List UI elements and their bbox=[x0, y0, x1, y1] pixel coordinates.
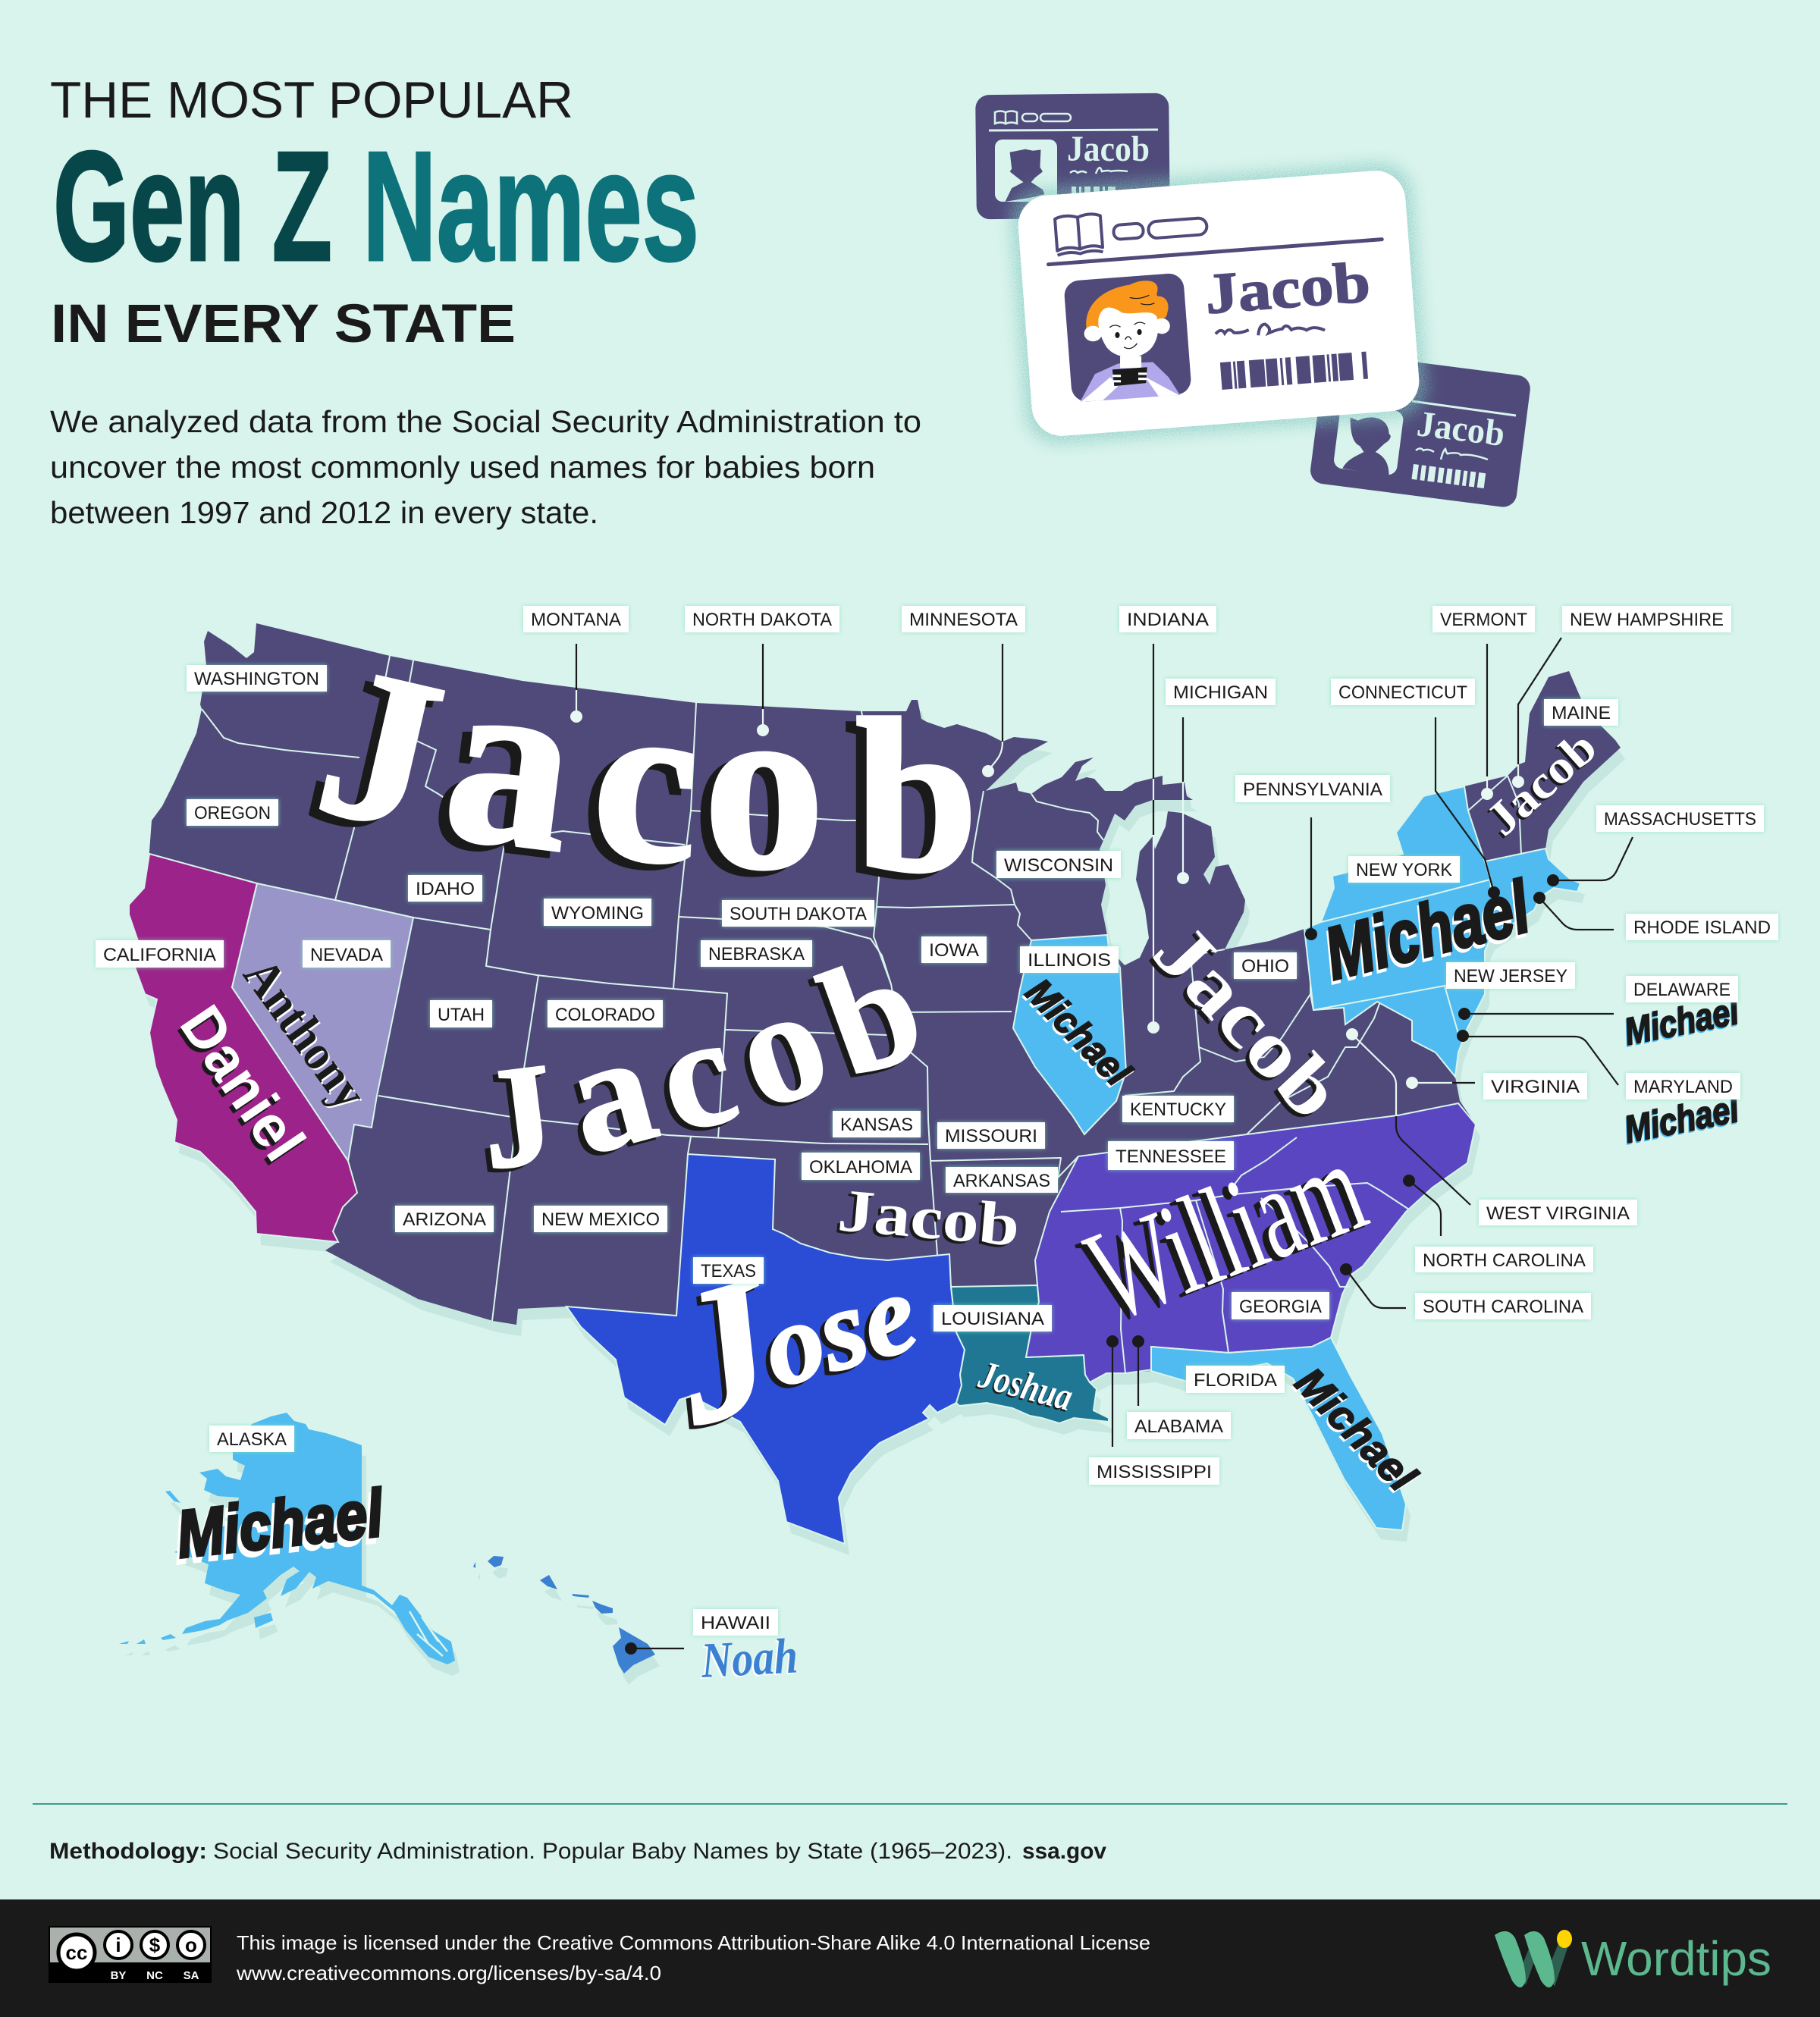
label: Mississippi bbox=[1089, 1457, 1219, 1485]
label: Ohio bbox=[1234, 952, 1297, 979]
label: Missouri: MISSOURI bbox=[945, 1126, 1037, 1147]
label: Maryland bbox=[1626, 1073, 1740, 1099]
state borders bbox=[202, 656, 1380, 1321]
name: Noah: Noah bbox=[699, 1628, 799, 1689]
leader: Alabama bbox=[1132, 1335, 1144, 1406]
label: Louisiana bbox=[934, 1305, 1052, 1332]
methodology: ssa.gov bbox=[1022, 1839, 1106, 1864]
label: Alaska bbox=[209, 1426, 294, 1452]
label: Kansas: KANSAS bbox=[840, 1115, 913, 1135]
leader: Mississippi bbox=[1106, 1335, 1119, 1447]
illustration: ID cards bbox=[975, 93, 1532, 509]
ID card: grainy shadow bbox=[1009, 162, 1429, 445]
label: Indiana bbox=[1119, 606, 1216, 632]
intro text: uncover the most commonly used names for babies born bbox=[50, 450, 875, 485]
name: Jacob (New England): Jacob bbox=[1476, 721, 1607, 845]
name: Jacob (central): J bbox=[472, 1034, 563, 1200]
label: Minnesota: MINNESOTA bbox=[909, 610, 1018, 630]
leader: North Dakota bbox=[757, 644, 769, 736]
name: Jacob (central) bbox=[472, 920, 943, 1200]
ID card: front white bbox=[1016, 168, 1421, 438]
label: Alaska: ALASKA bbox=[217, 1429, 287, 1450]
Alaska panhandle channels bbox=[410, 1611, 447, 1656]
label: Utah bbox=[430, 1000, 492, 1027]
label: Wyoming: WYOMING bbox=[551, 903, 644, 924]
intro text: between 1997 and 2012 in every state. bbox=[50, 495, 598, 530]
label: Minnesota bbox=[902, 606, 1025, 632]
label: Delaware bbox=[1626, 976, 1738, 1002]
name: Jacob (northwest and plains): a bbox=[433, 618, 589, 904]
label: Maryland: MARYLAND bbox=[1633, 1077, 1733, 1097]
label: Florida: FLORIDA bbox=[1194, 1370, 1277, 1391]
label: Illinois: ILLINOIS bbox=[1028, 950, 1111, 971]
leader: Vermont bbox=[1481, 644, 1493, 800]
label: Delaware: DELAWARE bbox=[1633, 980, 1731, 1000]
label: Illinois bbox=[1020, 946, 1119, 973]
label: Vermont: VERMONT bbox=[1440, 610, 1527, 630]
label: Pennsylvania bbox=[1235, 775, 1390, 802]
name: William: William bbox=[1069, 1112, 1382, 1349]
map shadow bbox=[124, 635, 1625, 1685]
name: Jacob (northwest and plains): c bbox=[587, 648, 705, 914]
icon: Creative Commons badge: o bbox=[185, 1934, 197, 1956]
label: Idaho: IDAHO bbox=[416, 879, 475, 899]
label: Texas bbox=[693, 1257, 764, 1284]
name: Michael (Northeast): Michael bbox=[1317, 864, 1539, 995]
name: Jacob (Indiana Ohio Kentucky): Jacob bbox=[1137, 906, 1360, 1136]
name: Jacob (central): c bbox=[641, 983, 752, 1166]
illustration: boy portrait bbox=[1080, 281, 1180, 402]
methodology: Methodology: bbox=[49, 1839, 207, 1864]
leader: Maryland bbox=[1457, 1030, 1618, 1085]
ID card: back bottom-right: Jacob bbox=[1415, 403, 1507, 454]
label: Washington: WASHINGTON bbox=[194, 669, 319, 689]
footer bar bbox=[0, 1899, 1820, 2017]
region: Texas (Jose) bbox=[566, 1154, 965, 1544]
label: Alabama: ALABAMA bbox=[1134, 1416, 1223, 1437]
label: North Carolina: NORTH CAROLINA bbox=[1423, 1250, 1586, 1271]
leader: New Hampshire bbox=[1512, 638, 1561, 788]
region: Jacob states base bbox=[129, 623, 1621, 1544]
logo: Wordtips: Wordtips bbox=[1581, 1931, 1771, 1986]
name: Jose bbox=[648, 1197, 938, 1465]
label: Wyoming bbox=[544, 899, 651, 926]
label: Rhode Island: RHODE ISLAND bbox=[1633, 918, 1771, 938]
name: Jose: ose bbox=[749, 1249, 930, 1411]
label: Montana: MONTANA bbox=[531, 610, 621, 630]
label: Colorado: COLORADO bbox=[555, 1005, 655, 1025]
label: Kansas bbox=[833, 1111, 921, 1137]
leader: Indiana bbox=[1147, 644, 1159, 1034]
license text: www.creativecommons.org/licenses/by-sa/4.0 bbox=[236, 1962, 661, 1984]
name: Jose: J bbox=[648, 1236, 803, 1465]
label: California bbox=[96, 940, 224, 968]
barcode bbox=[1220, 352, 1368, 390]
leader: Hawaii bbox=[625, 1642, 684, 1655]
region: Illinois (Michael) bbox=[1013, 935, 1126, 1134]
label: Georgia: GEORGIA bbox=[1239, 1297, 1322, 1317]
icon: Creative Commons badge: NC bbox=[146, 1969, 163, 1982]
label: West Virginia: WEST VIRGINIA bbox=[1486, 1203, 1630, 1224]
label: Rhode Island bbox=[1626, 914, 1778, 940]
label: Tennessee bbox=[1108, 1141, 1234, 1170]
icon: Creative Commons badge: SA bbox=[184, 1969, 199, 1982]
logo: Wordtips bbox=[1495, 1930, 1771, 1987]
region: Southeast (William) bbox=[1026, 1103, 1476, 1382]
icon: Creative Commons badge bbox=[49, 1926, 212, 1983]
label: Nebraska bbox=[701, 940, 812, 967]
title line: in every state: IN EVERY STATE bbox=[51, 294, 516, 354]
label: New Jersey: NEW JERSEY bbox=[1454, 966, 1567, 987]
label: Louisiana: LOUISIANA bbox=[941, 1309, 1044, 1329]
label: Texas: TEXAS bbox=[701, 1261, 756, 1281]
label: Arkansas: ARKANSAS bbox=[953, 1171, 1050, 1191]
name: Michael (Delaware): Michael bbox=[1621, 990, 1743, 1053]
label: Mississippi: MISSISSIPPI bbox=[1097, 1462, 1212, 1482]
label: Georgia bbox=[1232, 1292, 1329, 1319]
label: Washington bbox=[187, 665, 327, 692]
divider bbox=[33, 1803, 1787, 1805]
leader: Minnesota bbox=[982, 644, 1003, 777]
region: Louisiana (Joshua) bbox=[951, 1285, 1109, 1423]
name: Jacob (northwest and plains): o bbox=[704, 652, 824, 919]
label: Wisconsin: WISCONSIN bbox=[1004, 855, 1113, 876]
label: Hawaii: HAWAII bbox=[701, 1613, 770, 1633]
label: Massachusetts: MASSACHUSETTS bbox=[1604, 809, 1756, 830]
label: Idaho bbox=[408, 875, 482, 902]
title bbox=[50, 71, 699, 354]
region: Nevada (Anthony) bbox=[232, 883, 413, 1161]
label: New Mexico: NEW MEXICO bbox=[541, 1209, 660, 1230]
name: Jacob (northwest and plains) bbox=[301, 618, 977, 919]
label: Indiana: INDIANA bbox=[1127, 610, 1209, 630]
ID card: back top-left bbox=[975, 93, 1170, 219]
intro text bbox=[50, 404, 921, 530]
title line: Gen Z Names: Names bbox=[362, 119, 699, 293]
signature bbox=[1215, 320, 1325, 338]
label: Kentucky bbox=[1122, 1096, 1234, 1122]
icon: book bbox=[1055, 205, 1208, 256]
intro text: We analyzed data from the Social Security Administration to bbox=[50, 404, 921, 439]
label: Florida bbox=[1186, 1366, 1285, 1393]
label: Hawaii bbox=[693, 1609, 778, 1636]
label: Virginia: VIRGINIA bbox=[1491, 1077, 1580, 1097]
label: Vermont bbox=[1432, 606, 1535, 632]
label: Arizona: ARIZONA bbox=[403, 1209, 486, 1230]
label: Ohio: OHIO bbox=[1241, 956, 1289, 977]
label: Montana bbox=[523, 606, 629, 632]
license text bbox=[236, 1931, 1150, 1984]
label: Missouri bbox=[937, 1122, 1045, 1149]
leader: Rhode Island bbox=[1533, 892, 1614, 930]
label: New Mexico bbox=[534, 1206, 667, 1232]
name: Michael (Alaska): Michael bbox=[173, 1475, 388, 1572]
label: Colorado bbox=[548, 1000, 663, 1027]
leader: Delaware bbox=[1458, 1008, 1614, 1020]
label: Oregon bbox=[187, 799, 278, 826]
label: Nebraska: NEBRASKA bbox=[708, 944, 805, 965]
state labels bbox=[96, 606, 1778, 1636]
label: Alabama bbox=[1127, 1412, 1231, 1439]
label: Oklahoma: OKLAHOMA bbox=[809, 1157, 912, 1178]
label: Wisconsin bbox=[996, 851, 1121, 878]
region: California (Daniel) bbox=[129, 854, 357, 1242]
label: Maine: MAINE bbox=[1552, 703, 1611, 723]
label: North Dakota: NORTH DAKOTA bbox=[692, 610, 832, 630]
name: Michael (Maryland): Michael bbox=[1621, 1087, 1743, 1151]
leader: Massachusetts bbox=[1547, 837, 1633, 886]
label: Maine bbox=[1544, 699, 1618, 726]
label: West Virginia bbox=[1479, 1200, 1637, 1225]
label: Connecticut: CONNECTICUT bbox=[1338, 682, 1467, 703]
leader lines and dots bbox=[570, 638, 1633, 1655]
label: Utah: UTAH bbox=[438, 1005, 485, 1025]
label: New York: NEW YORK bbox=[1356, 860, 1452, 880]
name: Jacob (central): a bbox=[549, 998, 671, 1188]
leader: West Virginia bbox=[1346, 1028, 1470, 1205]
label: California: CALIFORNIA bbox=[103, 945, 216, 965]
leader: Pennsylvania bbox=[1305, 817, 1317, 940]
region: Northeast (Michael) bbox=[1304, 786, 1580, 1077]
icon: Creative Commons badge: $ bbox=[149, 1934, 161, 1956]
name: Joshua: Joshua bbox=[974, 1353, 1077, 1419]
region: Alaska (Michael) bbox=[119, 1413, 455, 1664]
region: Florida (Michael) bbox=[1151, 1338, 1406, 1530]
title line: Gen Z Names: Gen Z bbox=[53, 119, 332, 293]
leader: Connecticut bbox=[1436, 717, 1500, 899]
card name: Jacob bbox=[1203, 250, 1373, 326]
region: Hawaii (Noah) bbox=[473, 1556, 655, 1674]
label: South Carolina: SOUTH CAROLINA bbox=[1423, 1297, 1583, 1317]
label: Oregon: OREGON bbox=[194, 803, 271, 823]
name: Michael (Illinois): Michael bbox=[1018, 971, 1140, 1094]
icon: Creative Commons badge: BY bbox=[111, 1969, 126, 1982]
name: Jacob (central): b bbox=[802, 920, 943, 1111]
ID card: back top-left: Jacob bbox=[1067, 129, 1150, 169]
name: Jacob (central): o bbox=[714, 951, 847, 1143]
leader: Virginia bbox=[1406, 1077, 1475, 1089]
leader: Michigan bbox=[1177, 717, 1189, 884]
label: Nevada bbox=[303, 940, 391, 968]
map: United States bbox=[119, 623, 1621, 1674]
label: New York bbox=[1348, 856, 1460, 883]
southeast borders bbox=[1061, 1137, 1409, 1373]
title line: the most popular: THE MOST POPULAR bbox=[50, 71, 573, 129]
name: Anthony: Anthony bbox=[233, 949, 378, 1119]
icon: Creative Commons badge: cc bbox=[66, 1941, 87, 1964]
leader: Montana bbox=[570, 644, 582, 723]
name: Jacob (northwest and plains): J bbox=[301, 620, 460, 877]
methodology: Social Security Administration. Popular Baby Names by State (1965–2023). bbox=[213, 1839, 1012, 1864]
icon: Creative Commons badge: i bbox=[115, 1934, 121, 1956]
label: Tennessee: TENNESSEE bbox=[1116, 1147, 1226, 1167]
license text: This image is licensed under the Creative Commons Attribution-Share Alike 4.0 International License bbox=[237, 1931, 1150, 1954]
leader: North Carolina bbox=[1403, 1175, 1441, 1236]
name: Jacob (Oklahoma Arkansas): Jacob bbox=[835, 1177, 1022, 1259]
label: Michigan bbox=[1166, 679, 1276, 705]
label: South Dakota: SOUTH DAKOTA bbox=[730, 904, 867, 924]
label: Nevada: NEVADA bbox=[310, 945, 383, 965]
northeast borders bbox=[1313, 776, 1521, 1039]
label: Pennsylvania: PENNSYLVANIA bbox=[1243, 780, 1382, 800]
name: Daniel: Daniel bbox=[168, 993, 318, 1172]
label: Iowa: IOWA bbox=[929, 940, 979, 961]
label: Arizona bbox=[395, 1206, 494, 1232]
label: Virginia bbox=[1483, 1073, 1587, 1099]
name: Michael (Florida): Michael bbox=[1286, 1358, 1426, 1501]
name: Jacob (northwest and plains): b bbox=[855, 674, 977, 918]
ID card: back bottom-right bbox=[1309, 350, 1532, 509]
label: Oklahoma bbox=[802, 1153, 920, 1180]
label: Iowa bbox=[921, 936, 987, 963]
label: Kentucky: KENTUCKY bbox=[1130, 1099, 1226, 1120]
label: Michigan: MICHIGAN bbox=[1173, 682, 1268, 703]
leader: South Carolina bbox=[1340, 1263, 1406, 1308]
title line: Gen Z Names bbox=[53, 119, 699, 293]
label: New Hampshire: NEW HAMPSHIRE bbox=[1570, 610, 1724, 630]
